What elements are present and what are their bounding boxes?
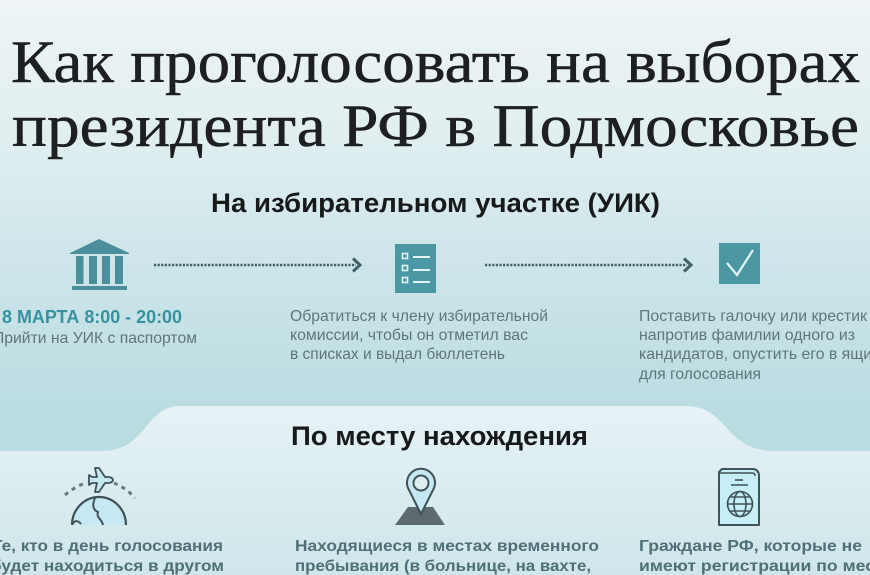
arrow: step 2 to step 3 (485, 258, 691, 272)
title: Как проголосовать на выборах (11, 29, 860, 95)
step 2 text (290, 308, 548, 363)
title (11, 29, 860, 159)
arrow: step 1 to step 2 (154, 258, 360, 272)
step 3 text (639, 308, 870, 383)
step 1 text (0, 307, 197, 347)
step 3 text: напротив фамилии одного из (639, 327, 855, 344)
icon: checklist (395, 244, 436, 293)
column 1 text (0, 538, 224, 575)
icon: passport (719, 469, 759, 525)
icon: map location pin (395, 469, 445, 525)
icon: polling station building (70, 239, 129, 290)
step 2 text: в списках и выдал бюллетень (290, 346, 505, 363)
step 2 text: Обратиться к члену избирательной (290, 308, 548, 325)
step 3 text: для голосования (639, 366, 761, 383)
heading: by location: По месту нахождения (291, 421, 588, 451)
column 2 text (295, 538, 599, 575)
step 3 text: Поставить галочку или крестик (639, 308, 868, 325)
column 3 text: Граждане РФ, которые не (639, 538, 862, 555)
icon: check mark box (719, 243, 760, 284)
step 1 text: 8 МАРТА 8:00 - 20:00 (2, 307, 182, 327)
heading: at the polling station: На избирательном участке (УИК) (211, 188, 660, 218)
column 3 text: имеют регистрации по месту (639, 558, 870, 575)
column 3 text (639, 538, 870, 575)
step 2 text: комиссии, чтобы он отметил вас (290, 327, 528, 344)
icon: plane over globe (65, 468, 135, 525)
column 2 text: Находящиеся в местах временного (295, 538, 599, 555)
column 2 text: пребывания (в больнице, на вахте, (295, 558, 591, 575)
panel: lower section background (0, 406, 870, 575)
title: президента РФ в Подмосковье (12, 93, 859, 159)
